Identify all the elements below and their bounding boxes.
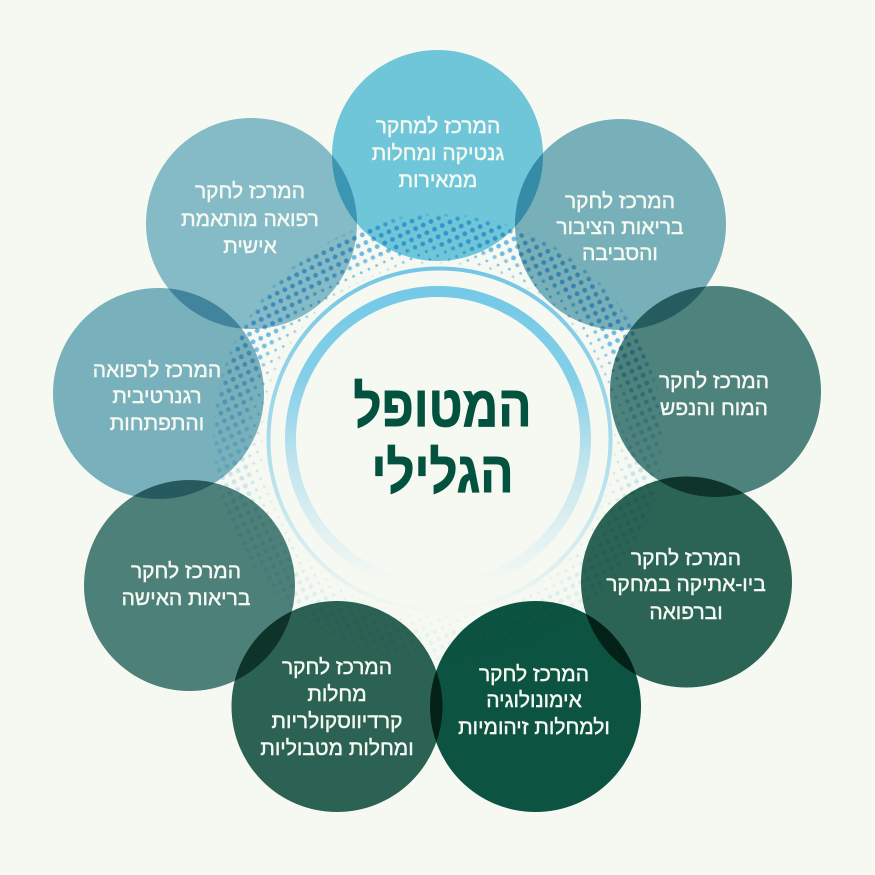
center title: המטופל [353,374,532,439]
halftone dot ring [213,214,662,660]
center rings [268,268,610,610]
circle: cardiovascular and metabolic diseases: ומחלות מטבוליות [260,737,414,760]
circle: public health and environment [515,119,726,330]
circle: cardiovascular and metabolic diseases: מחלות [307,683,367,706]
circle: cardiovascular and metabolic diseases: המרכז לחקר [282,656,392,679]
circle: regenerative medicine: והתפתחות [110,412,204,435]
circle: regenerative medicine: המרכז לרפואה [93,359,221,382]
circle: brain and mind: המרכז לחקר [659,370,769,393]
circle: public health and environment: והסביבה [582,242,658,265]
circle: personalized medicine [146,118,357,329]
center title: הגלילי [371,440,514,505]
circle: regenerative medicine: רגנרטיבית [112,385,202,408]
circle: bioethics: ביו-אתיקה במחקר [606,573,766,596]
circle: bioethics [581,476,792,688]
circle: genetics and rare diseases: המרכז למחקר [376,115,500,138]
circle: immunology and infectious diseases: המרכז לחקר [479,663,589,686]
circle: personalized medicine: רפואה מותאמת [181,208,319,231]
circle: personalized medicine: אישית [223,235,277,258]
circle: brain and mind: המוח והנפש [660,397,768,420]
circle: women's health [84,480,295,691]
circle: immunology and infectious diseases: ולמחלות זיהומיות [458,716,610,739]
circle: bioethics: המרכז לחקר [631,547,741,570]
circle: public health and environment: המרכז לחקר [565,190,675,213]
circle: public health and environment: בריאות הציבור [556,216,684,239]
circle: regenerative medicine [53,288,264,499]
circle: bioethics: וברפואה [649,601,723,624]
circle: personalized medicine: המרכז לחקר [195,180,305,203]
circle: genetics and rare diseases [332,50,543,261]
circle: immunology and infectious diseases: אימונולוגיה [486,689,582,712]
circle: cardiovascular and metabolic diseases: קרדיווסקולריות [272,710,402,733]
circle: women's health: המרכז לחקר [131,560,241,583]
circle: genetics and rare diseases: ממאירות [399,169,477,192]
circle: brain and mind [610,286,821,497]
circle: immunology and infectious diseases [430,601,641,812]
circle: genetics and rare diseases: גנטיקה ומחלות [372,142,504,165]
circle: cardiovascular and metabolic diseases [232,601,442,812]
center title [353,374,532,505]
circle: women's health: בריאות האישה [122,587,250,610]
